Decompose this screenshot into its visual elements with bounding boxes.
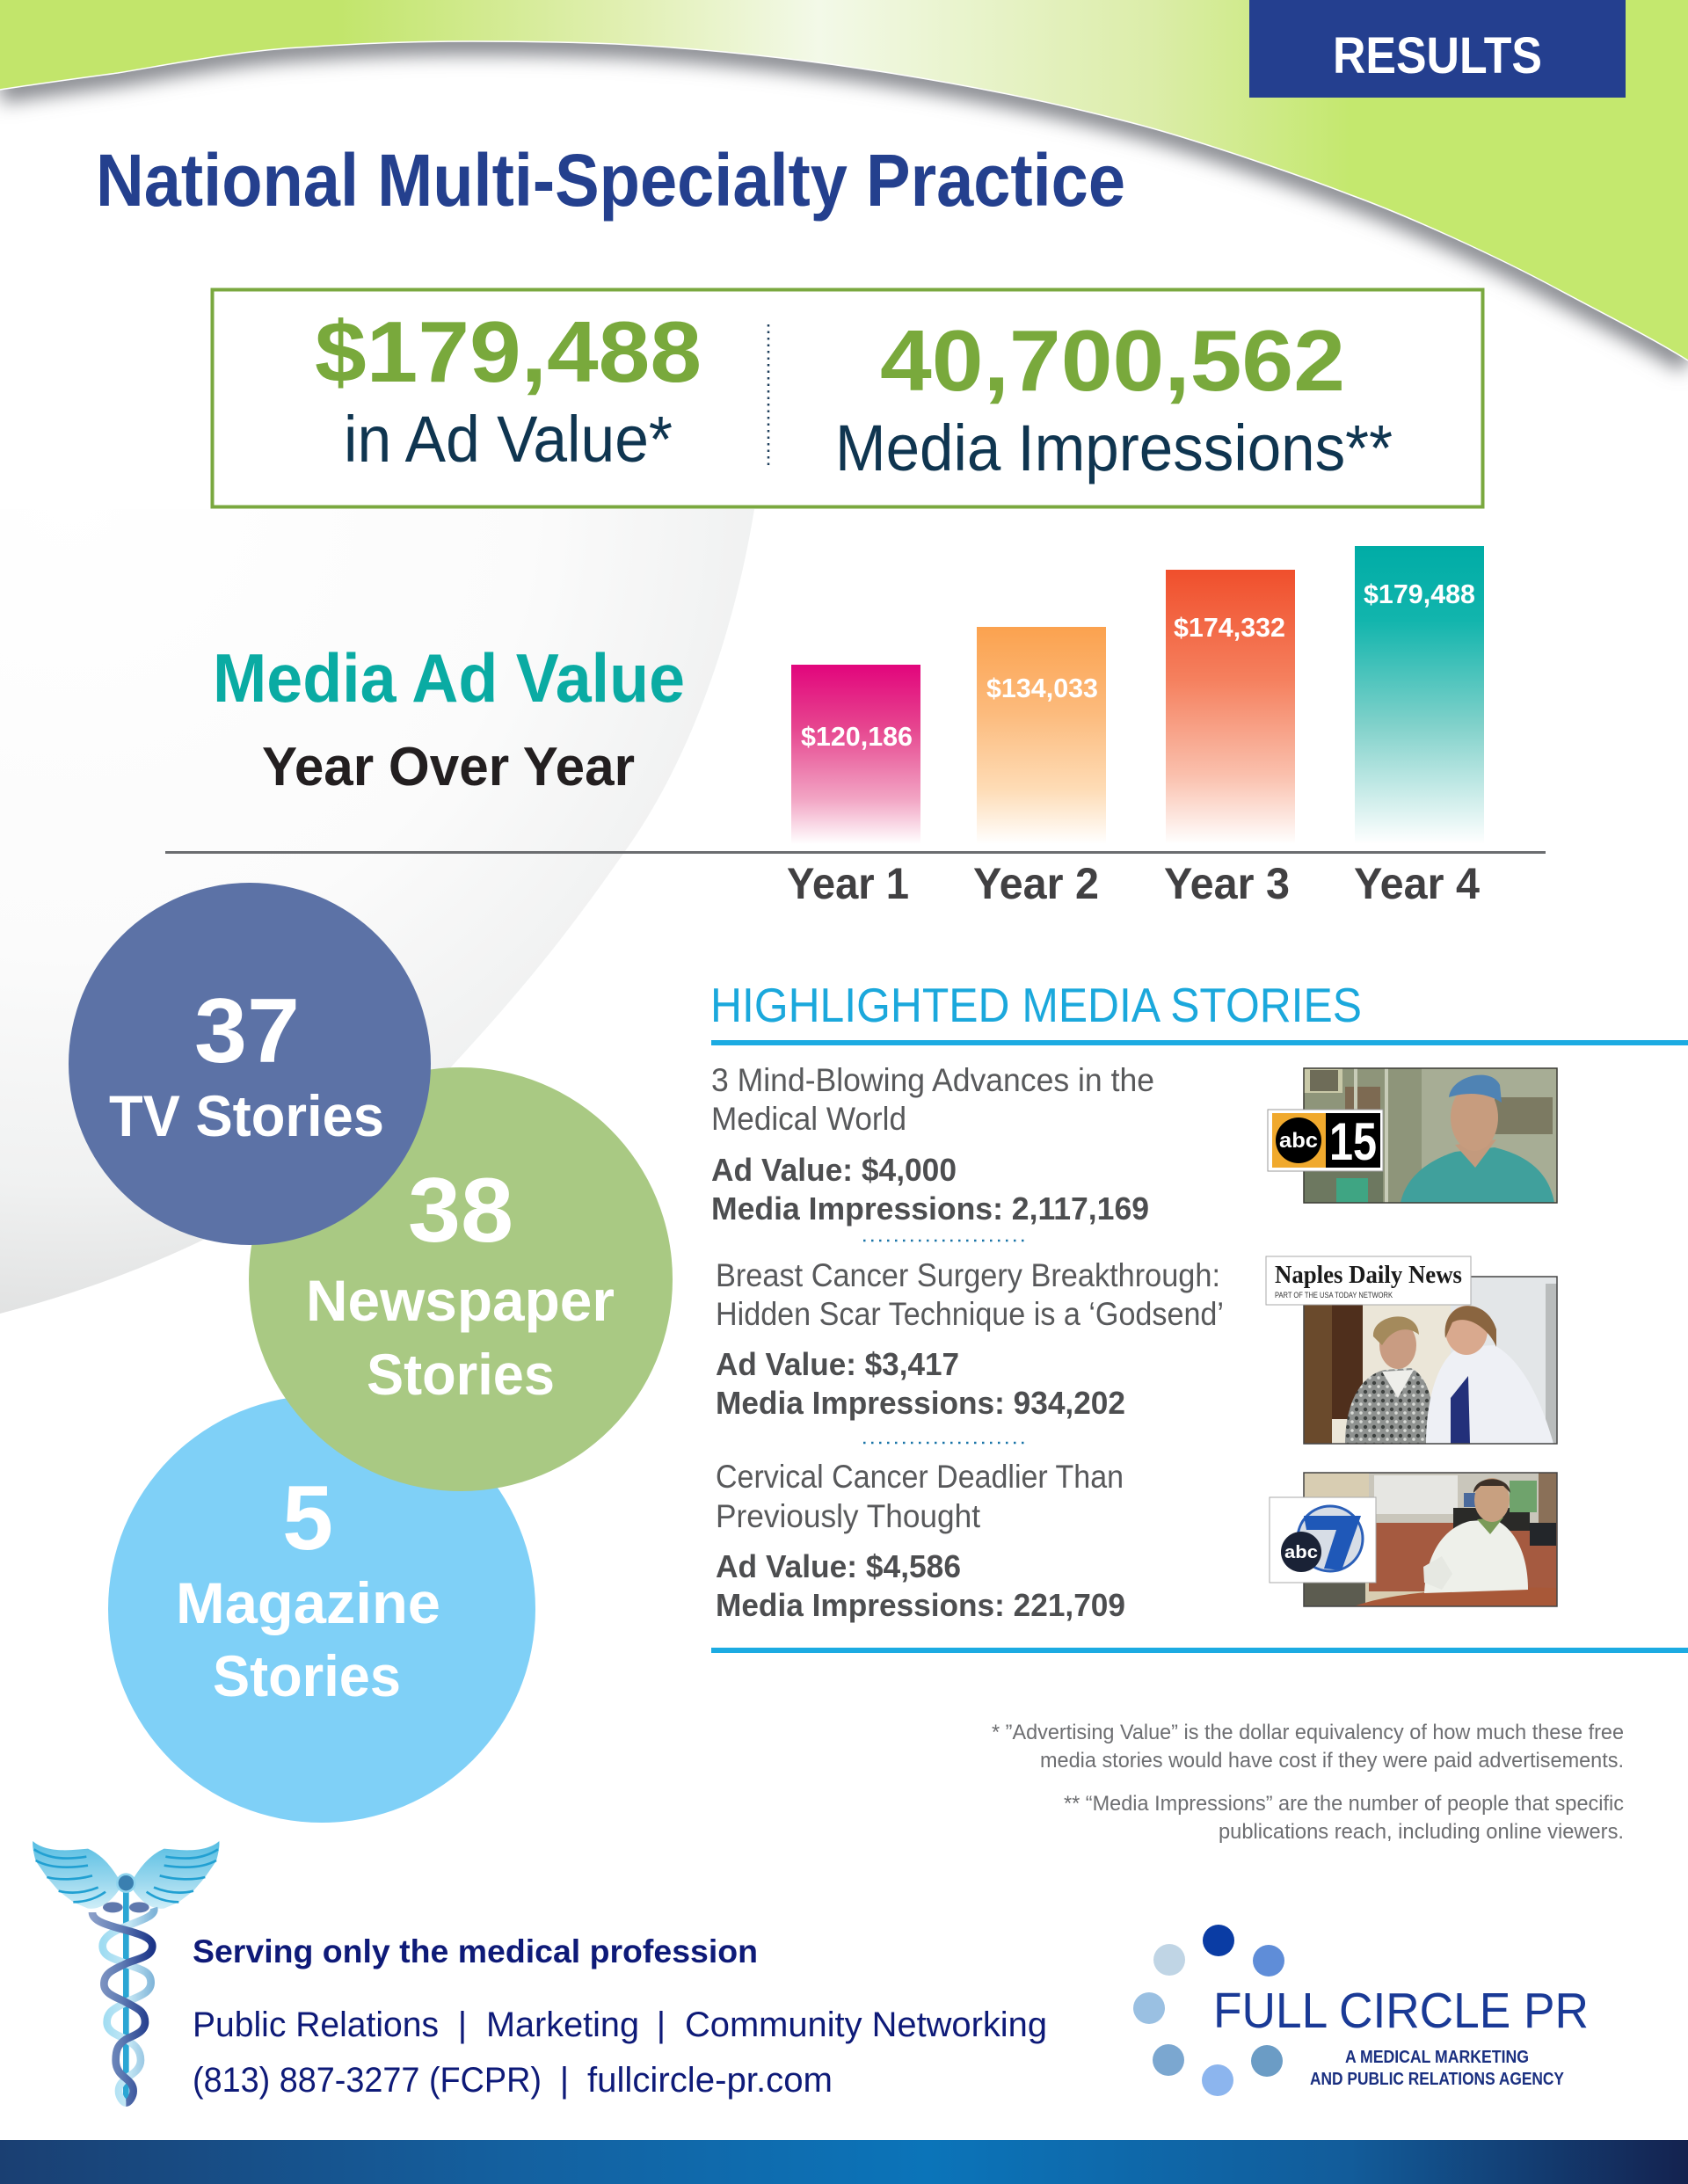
results tab xyxy=(1249,0,1626,98)
bar: year 1: $120,186 xyxy=(801,721,913,752)
photo: abc15 surgeon xyxy=(1268,1068,1557,1203)
ad value total: in Ad Value* xyxy=(344,403,673,476)
story 2 text: Ad Value: $3,417 xyxy=(716,1346,959,1382)
axis labels: Year 2 xyxy=(973,859,1099,908)
media impressions total xyxy=(835,312,1393,484)
left wing xyxy=(33,1841,119,1909)
footer contact text: Public Relations xyxy=(193,2006,439,2044)
circle: magazine stories xyxy=(108,1395,535,1823)
story 2 text: Breast Cancer Surgery Breakthrough: xyxy=(716,1257,1220,1293)
footnotes: * ”Advertising Value” is the dollar equivalency of how much these free xyxy=(992,1721,1624,1744)
logo: naples daily news xyxy=(1266,1256,1471,1305)
logo: naples daily news: Naples Daily News xyxy=(1275,1261,1462,1289)
bar: year 2 xyxy=(977,627,1106,844)
logo: abc 15: 15 xyxy=(1329,1112,1377,1171)
photo: abc7 doctor xyxy=(1270,1473,1557,1606)
bar chart xyxy=(165,546,1546,908)
circle: tv stories: 37 xyxy=(194,980,300,1082)
logo: abc 7: abc xyxy=(1284,1543,1318,1562)
logo: naples daily news: PART OF THE USA TODAY NETWORK xyxy=(1275,1291,1393,1300)
axis labels: Year 4 xyxy=(1354,859,1480,908)
story 2 text: Media Impressions: 934,202 xyxy=(716,1385,1125,1421)
circle: tv stories: TV Stories xyxy=(109,1083,384,1148)
bar: year 4 xyxy=(1355,546,1484,844)
axis labels xyxy=(787,859,1480,908)
story 1 text: Media Impressions: 2,117,169 xyxy=(711,1190,1149,1227)
media impressions total: Media Impressions** xyxy=(835,411,1393,484)
footer contact text: | xyxy=(657,2006,666,2044)
footer contact text: Marketing xyxy=(486,2006,639,2044)
circle: newspaper stories: 38 xyxy=(408,1160,513,1262)
logo: abc 7 xyxy=(1270,1497,1376,1583)
chart heading xyxy=(213,639,685,797)
story 3 text: Cervical Cancer Deadlier Than xyxy=(716,1459,1124,1495)
circle: newspaper stories: Stories xyxy=(367,1342,555,1407)
bar: year 4: $179,488 xyxy=(1364,579,1475,609)
media impressions total: 40,700,562 xyxy=(880,312,1345,409)
logo: full circle pr xyxy=(1133,1925,1589,2096)
photo: naples daily news xyxy=(1266,1256,1557,1444)
axis labels: Year 1 xyxy=(787,859,909,908)
logo: abc 15: abc xyxy=(1279,1129,1318,1153)
circle: magazine stories: Magazine xyxy=(176,1570,440,1635)
circle: tv stories xyxy=(69,883,431,1245)
logo: full circle pr: AND PUBLIC RELATIONS AGENCY xyxy=(1310,2070,1565,2089)
story 2 text xyxy=(716,1257,1224,1421)
footnotes xyxy=(992,1721,1624,1844)
story 1 text: Ad Value: $4,000 xyxy=(711,1152,957,1188)
story 3 text: Previously Thought xyxy=(716,1498,981,1534)
story 1 text: Medical World xyxy=(711,1101,906,1137)
logo: full circle pr: A MEDICAL MARKETING xyxy=(1345,2048,1529,2067)
story 3 text xyxy=(716,1459,1125,1623)
footer contact text: (813) 887-3277 (FCPR) xyxy=(193,2061,542,2100)
results tab: RESULTS xyxy=(1333,27,1542,84)
logo: abc 15 xyxy=(1268,1110,1383,1171)
circle: magazine stories: 5 xyxy=(282,1467,333,1569)
circle: magazine stories: Stories xyxy=(213,1643,401,1708)
title: National Multi-Specialty Practice xyxy=(96,139,1125,222)
background: green top swoosh xyxy=(0,0,1688,380)
story 1 text xyxy=(711,1062,1154,1227)
panel: highlighted media stories xyxy=(710,978,1688,1653)
ad value total: $179,488 xyxy=(315,303,702,400)
icon: caduceus xyxy=(33,1841,219,2103)
chart heading: Media Ad Value xyxy=(213,639,685,717)
right wing xyxy=(134,1841,219,1909)
circle: newspaper stories: Newspaper xyxy=(306,1268,615,1333)
footnotes: publications reach, including online viewers. xyxy=(1219,1820,1624,1844)
footer contact text: | xyxy=(458,2006,467,2044)
section heading: HIGHLIGHTED MEDIA STORIES xyxy=(710,978,1362,1032)
ad value total xyxy=(315,303,702,476)
circle: newspaper stories xyxy=(249,1067,673,1491)
footer contact text: Community Networking xyxy=(685,2006,1047,2044)
logo dots xyxy=(1133,1925,1284,2096)
axis labels: Year 3 xyxy=(1164,859,1290,908)
footer contact text: Serving only the medical profession xyxy=(193,1933,758,1969)
bar: year 3: $174,332 xyxy=(1174,612,1285,643)
story 2 text: Hidden Scar Technique is a ‘Godsend’ xyxy=(716,1296,1224,1332)
panel: headline totals xyxy=(213,290,1482,506)
footer bar xyxy=(0,2140,1688,2184)
bar: year 1 xyxy=(791,665,920,844)
story 3 text: Media Impressions: 221,709 xyxy=(716,1587,1125,1623)
logo: full circle pr: FULL CIRCLE PR xyxy=(1213,1983,1589,2039)
story 3 text: Ad Value: $4,586 xyxy=(716,1548,961,1584)
background: grey arc xyxy=(0,509,754,1314)
footer contact text xyxy=(193,1933,1047,2100)
story 1 text: 3 Mind-Blowing Advances in the xyxy=(711,1062,1154,1098)
footer contact text: fullcircle-pr.com xyxy=(587,2061,833,2100)
footer contact text: | xyxy=(560,2061,569,2100)
bar: year 3 xyxy=(1166,570,1295,844)
footnotes: media stories would have cost if they were paid advertisements. xyxy=(1040,1749,1624,1773)
chart heading: Year Over Year xyxy=(262,737,635,797)
footnotes: ** “Media Impressions” are the number of people that specific xyxy=(1064,1792,1624,1816)
bar: year 2: $134,033 xyxy=(986,673,1098,703)
